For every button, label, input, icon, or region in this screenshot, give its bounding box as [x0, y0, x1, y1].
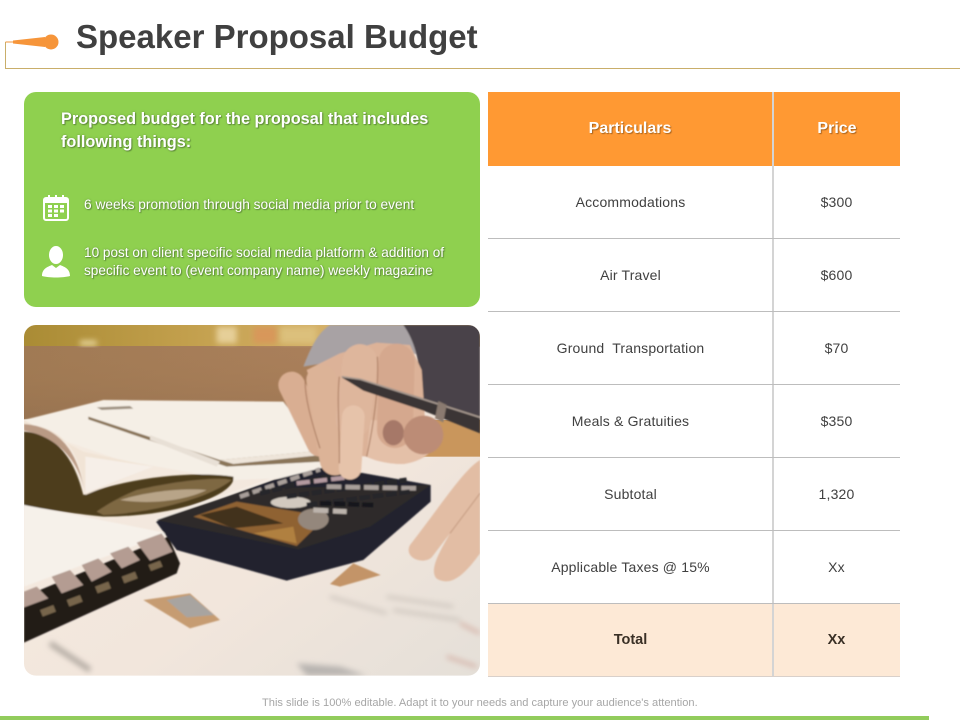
book page [24, 420, 124, 496]
row: meals: Meals & Gratuities [572, 413, 689, 429]
pen [342, 377, 480, 433]
bullet text: social media post: 10 post on client specific social media platform & addition of [84, 245, 444, 260]
price: air travel: $600 [821, 267, 852, 283]
price: meals: $350 [821, 413, 852, 429]
icon: calendar [43, 195, 69, 221]
row: accommodations: Accommodations [576, 194, 685, 210]
right hand [409, 460, 480, 581]
row: air travel: Air Travel [600, 267, 661, 283]
table header: price [774, 92, 900, 166]
bullet text: social media post: specific event to (event company name) weekly magazine [84, 262, 433, 278]
table header: particulars: Particulars [589, 120, 671, 137]
blurred prints on paper [143, 593, 220, 628]
icon: microphone with title bracket line [5, 34, 960, 69]
price: taxes: Xx [828, 559, 845, 575]
table paper behind [24, 400, 322, 480]
sweater [303, 325, 433, 367]
title: Speaker Proposal Budget [76, 18, 478, 55]
book shadow [24, 432, 233, 517]
bullet text: promotion: 6 weeks promotion through social media prior to event [84, 197, 414, 212]
table [488, 92, 900, 676]
row: subtotal: Subtotal [604, 486, 657, 502]
photo: hand using calculator [24, 325, 480, 676]
palm and back of hand [306, 342, 426, 458]
price: ground transportation: $70 [825, 340, 848, 356]
total row background [488, 603, 900, 676]
table header: particulars [488, 92, 772, 166]
panel: budget summary [24, 92, 480, 307]
row: total: Total [614, 632, 647, 648]
panel heading: Proposed budget for the proposal that includes [61, 110, 428, 128]
clipboard edge [88, 417, 322, 467]
panel heading [60, 110, 429, 152]
calculator keys [240, 469, 320, 497]
footer bar [0, 716, 929, 720]
calculator body [156, 467, 431, 581]
panel heading: following things: [61, 133, 191, 151]
lower notebook [24, 505, 168, 587]
price: accommodations: $300 [821, 194, 852, 210]
row: taxes: Applicable Taxes @ 15% [551, 559, 710, 575]
icon: person [42, 246, 70, 278]
row: ground transportation: Ground Transportation [557, 340, 704, 356]
table header: price: Price [817, 120, 857, 137]
fingers [292, 385, 320, 443]
price: subtotal: 1,320 [819, 486, 854, 502]
bullet text: social media post [84, 245, 446, 280]
footer note: This slide is 100% editable. Adapt it to your needs and capture your audience's attention. [262, 697, 698, 709]
price: total: Xx [828, 632, 845, 648]
